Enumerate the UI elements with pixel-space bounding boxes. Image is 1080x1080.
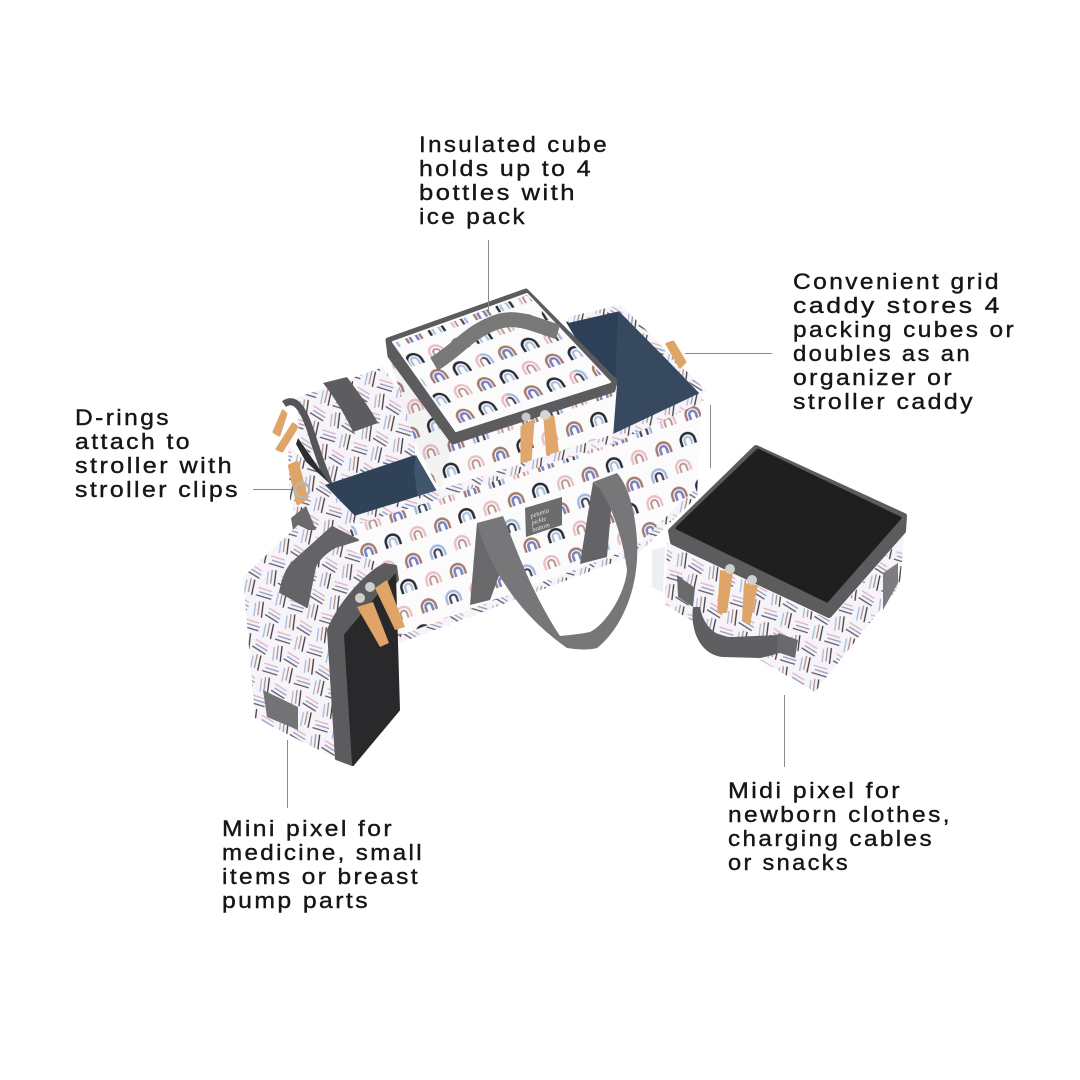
callout: mini pixel: items or breast	[222, 864, 420, 889]
insulated cube	[388, 291, 617, 492]
callout: convenient grid caddy: organizer or	[793, 365, 954, 390]
caddy right compartment	[566, 308, 704, 440]
callout: insulated cube: holds up to 4	[419, 156, 593, 181]
caddy right rim tab	[667, 342, 685, 367]
callout: convenient grid caddy: Convenient grid	[793, 269, 1001, 294]
brand patch: petunia	[529, 507, 550, 520]
callout: insulated cube: ice pack	[419, 204, 527, 229]
midi zipper pulls	[717, 564, 758, 625]
callout: convenient grid caddy	[793, 269, 1016, 414]
callout: mini pixel: pump parts	[222, 888, 370, 913]
mini label patch	[263, 690, 298, 730]
callout: insulated cube: Insulated cube	[419, 132, 609, 157]
back cube zipper pulls	[274, 411, 297, 451]
callout: midi pixel	[728, 778, 952, 875]
back pixel: standing mini cube	[284, 367, 415, 484]
callout: convenient grid caddy: caddy stores 4	[793, 293, 1002, 318]
callout: convenient grid caddy: doubles as an	[793, 341, 972, 366]
callout: convenient grid caddy: packing cubes or	[793, 317, 1016, 342]
mini pixel	[243, 525, 405, 765]
callout: convenient grid caddy: stroller caddy	[793, 389, 975, 414]
callout: midi pixel: Midi pixel for	[728, 778, 902, 803]
D-ring and tab	[290, 463, 316, 530]
callout: midi pixel: charging cables	[728, 826, 934, 851]
brand patch: pickle	[530, 515, 547, 527]
leader lines	[253, 240, 784, 808]
callout: midi pixel: newborn clothes,	[728, 802, 952, 827]
brand patch	[525, 497, 562, 537]
callout: insulated cube	[419, 132, 609, 229]
mini zipper band	[328, 564, 398, 765]
mini black zip panel	[345, 575, 399, 765]
callout: insulated cube: bottles with	[419, 180, 577, 205]
caddy strap	[470, 473, 637, 650]
callout: mini pixel: Mini pixel for	[222, 816, 394, 841]
product: grid caddy with packing cubes	[243, 291, 904, 765]
brand patch: bottom	[531, 522, 551, 534]
callout: mini pixel: medicine, small	[222, 840, 424, 865]
midi lid	[671, 448, 904, 615]
callout: midi pixel: or snacks	[728, 850, 850, 875]
caddy left wall with D-ring side	[288, 445, 357, 565]
midi handle	[677, 575, 798, 658]
mini zipper pulls	[355, 580, 405, 647]
cube zipper pulls	[522, 410, 558, 467]
callout: D-rings	[75, 405, 240, 502]
callout: D-rings: D-rings	[75, 405, 171, 430]
caddy left compartment	[325, 455, 438, 518]
caddy front panel	[335, 393, 702, 643]
callout: D-rings: stroller clips	[75, 477, 240, 502]
midi pixel	[652, 448, 904, 692]
cube lid	[388, 291, 615, 442]
callout: D-rings: stroller with	[75, 453, 234, 478]
callout: mini pixel	[222, 816, 424, 913]
callout: D-rings: attach to	[75, 429, 192, 454]
mini handle	[280, 527, 358, 607]
cube handle	[434, 320, 558, 364]
